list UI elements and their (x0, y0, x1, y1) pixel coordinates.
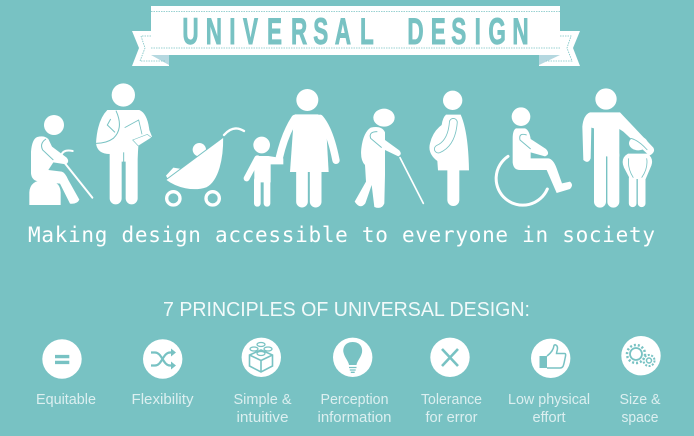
principle: simple and intuitive: intuitive (236, 410, 288, 426)
principle: size and space: Size & (620, 392, 661, 408)
principle: equitable: Equitable (36, 392, 96, 408)
principle: low physical effort (508, 339, 590, 426)
principle: flexibility (132, 339, 194, 408)
section heading: 7 PRINCIPLES OF UNIVERSAL DESIGN: (163, 299, 530, 321)
principle: simple and intuitive (234, 338, 292, 426)
icon: gears (621, 336, 661, 375)
principle: perception information (318, 338, 392, 426)
principle: perception information: Perception (320, 392, 388, 408)
principle: tolerance for error: Tolerance (421, 392, 482, 408)
figure: mother (279, 89, 336, 202)
principle: size and space (620, 336, 661, 426)
figure: person with bag and book (96, 83, 152, 205)
principle: low physical effort: Low physical (508, 392, 590, 408)
figure: stroller (166, 128, 244, 205)
principle: flexibility: Flexibility (132, 392, 194, 408)
principle: equitable (36, 339, 96, 408)
tagline: Making design accessible to everyone in society (28, 223, 655, 247)
principle: tolerance for error (421, 338, 482, 426)
principle: simple and intuitive: Simple & (234, 392, 292, 408)
figure: child holding mother's hand (247, 89, 336, 203)
icon: thumbs up (531, 339, 570, 378)
principle: perception information: information (318, 410, 392, 426)
principle: tolerance for error: for error (426, 410, 478, 426)
figure: seated elder with cane (29, 115, 92, 205)
figure: wheelchair user (496, 107, 572, 205)
figure: small child (623, 136, 652, 203)
figure: elderly walker with white cane (355, 109, 423, 208)
icon: light bulb (333, 338, 372, 377)
icon: shuffle arrows (143, 339, 182, 379)
title text: UNIVERSAL DESIGN (182, 10, 529, 52)
icon: building brick (242, 338, 281, 377)
principle: low physical effort: effort (532, 410, 566, 426)
figure: pregnant woman (429, 91, 469, 200)
title banner (132, 6, 580, 66)
icon: equals (42, 339, 82, 379)
icon: cross (430, 338, 470, 377)
principle: size and space: space (622, 410, 658, 426)
figure: adult with hand on child (582, 88, 654, 207)
